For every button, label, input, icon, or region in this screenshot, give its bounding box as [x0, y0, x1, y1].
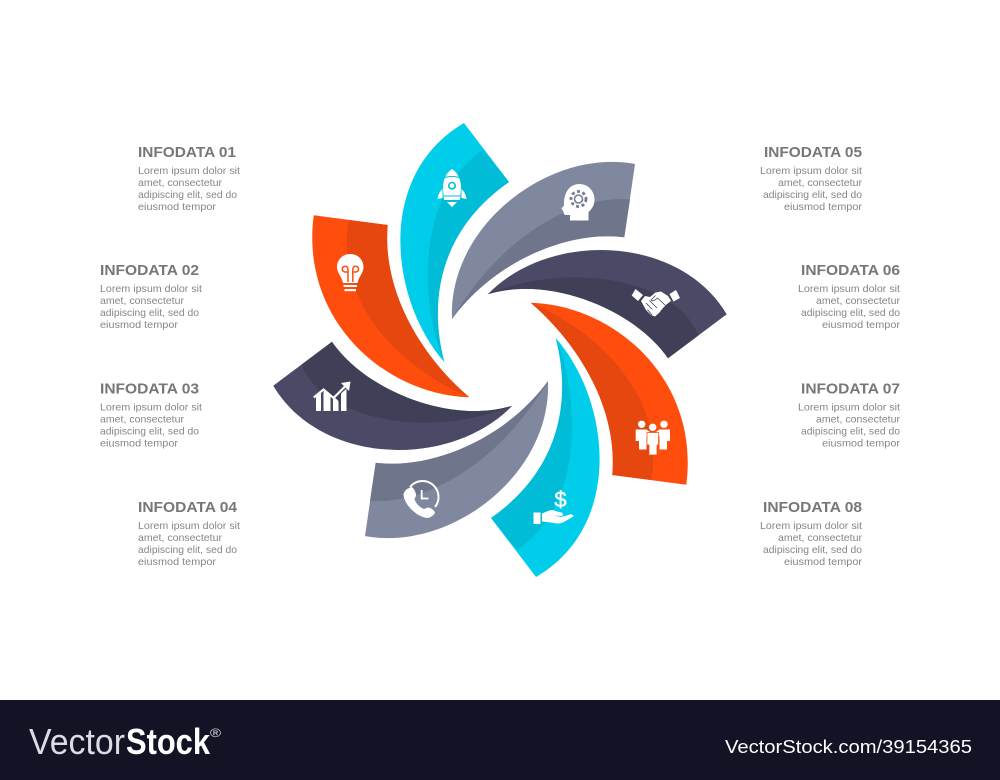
logo: VectorStock: Vector	[29, 721, 125, 762]
petal 06: navy handshake	[488, 250, 727, 358]
text block: infodata 06: adipiscing elit, sed do	[801, 307, 900, 319]
text block: infodata 04: amet, consectetur	[138, 532, 222, 544]
text block: infodata 02: eiusmod tempor	[100, 319, 179, 331]
text block: infodata 05: Lorem ipsum dolor sit	[760, 165, 862, 177]
text block: infodata 03: eiusmod tempor	[100, 438, 179, 450]
text block: infodata 07: adipiscing elit, sed do	[801, 426, 900, 438]
icon: phone and clock	[404, 481, 439, 518]
footer url: VectorStock.com/39154365	[725, 736, 972, 757]
text block: infodata 05: amet, consectetur	[778, 177, 862, 189]
logo: VectorStock	[29, 721, 221, 762]
text block: infodata 02: INFODATA 02	[100, 262, 199, 279]
text block: infodata 08: eiusmod tempor	[784, 556, 863, 568]
text block: infodata 02: adipiscing elit, sed do	[100, 307, 199, 319]
text block: infodata 03: Lorem ipsum dolor sit	[100, 402, 202, 414]
text block: infodata 08: INFODATA 08	[763, 499, 862, 516]
petal 04: grey phone clock	[365, 381, 548, 538]
text block: infodata 04: eiusmod tempor	[138, 556, 217, 568]
footer band	[0, 700, 1000, 780]
text block: infodata 01: eiusmod tempor	[138, 201, 217, 213]
text block: infodata 04: adipiscing elit, sed do	[138, 544, 237, 556]
text block: infodata 05	[760, 144, 863, 213]
petal 02: orange light bulb	[312, 215, 469, 397]
text block: infodata 01	[138, 144, 240, 213]
text block: infodata 05: adipiscing elit, sed do	[763, 189, 862, 201]
text block: infodata 06: INFODATA 06	[801, 262, 900, 279]
icon: hand holding dollar	[534, 487, 574, 524]
icon: head with gear	[562, 184, 594, 220]
icon: light bulb	[337, 254, 364, 291]
petal 01: cyan rocket	[400, 123, 509, 362]
icon: bar chart with arrow	[314, 382, 350, 411]
text block: infodata 05: eiusmod tempor	[784, 201, 863, 213]
text block: infodata 05: INFODATA 05	[764, 144, 862, 161]
text block: infodata 06: eiusmod tempor	[822, 319, 901, 331]
logo: VectorStock: Stock	[126, 721, 211, 762]
text block: infodata 01: INFODATA 01	[138, 144, 236, 161]
text block: infodata 07: eiusmod tempor	[822, 438, 901, 450]
text block: infodata 01: adipiscing elit, sed do	[138, 189, 237, 201]
icon: three people	[636, 421, 670, 455]
text block: infodata 04	[138, 499, 240, 568]
petal 07: orange team	[531, 303, 688, 485]
text block: infodata 06: Lorem ipsum dolor sit	[798, 283, 900, 295]
text block: infodata 03: amet, consectetur	[100, 414, 184, 426]
text block: infodata 04: Lorem ipsum dolor sit	[138, 520, 240, 532]
text block: infodata 02	[100, 262, 202, 331]
text block: infodata 01: Lorem ipsum dolor sit	[138, 165, 240, 177]
text block: infodata 01: amet, consectetur	[138, 177, 222, 189]
text block: infodata 02: amet, consectetur	[100, 295, 184, 307]
petal 08: cyan hand with dollar	[491, 338, 600, 577]
text block: infodata 06: amet, consectetur	[816, 295, 900, 307]
text block: infodata 02: Lorem ipsum dolor sit	[100, 283, 202, 295]
text block: infodata 04: INFODATA 04	[138, 499, 238, 516]
text block: infodata 08	[760, 499, 863, 568]
text block: infodata 07: amet, consectetur	[816, 414, 900, 426]
text block: infodata 03	[100, 380, 202, 450]
icon: handshake	[632, 289, 680, 316]
text block: infodata 08: adipiscing elit, sed do	[763, 544, 862, 556]
petal 05: grey head with gear	[452, 162, 635, 319]
text block: infodata 03: INFODATA 03	[100, 380, 199, 398]
logo: VectorStock: ®	[210, 726, 221, 740]
text block: infodata 03: adipiscing elit, sed do	[100, 426, 199, 438]
text block: infodata 06	[798, 262, 901, 331]
text block: infodata 07: Lorem ipsum dolor sit	[798, 402, 900, 414]
text block: infodata 08: amet, consectetur	[778, 532, 862, 544]
icon: hand holding dollar: $	[554, 487, 567, 512]
icon: rocket	[438, 169, 466, 207]
text block: infodata 07	[798, 380, 901, 450]
text block: infodata 07: INFODATA 07	[801, 380, 900, 398]
petal 03: navy chart	[273, 342, 512, 450]
text block: infodata 08: Lorem ipsum dolor sit	[760, 520, 862, 532]
